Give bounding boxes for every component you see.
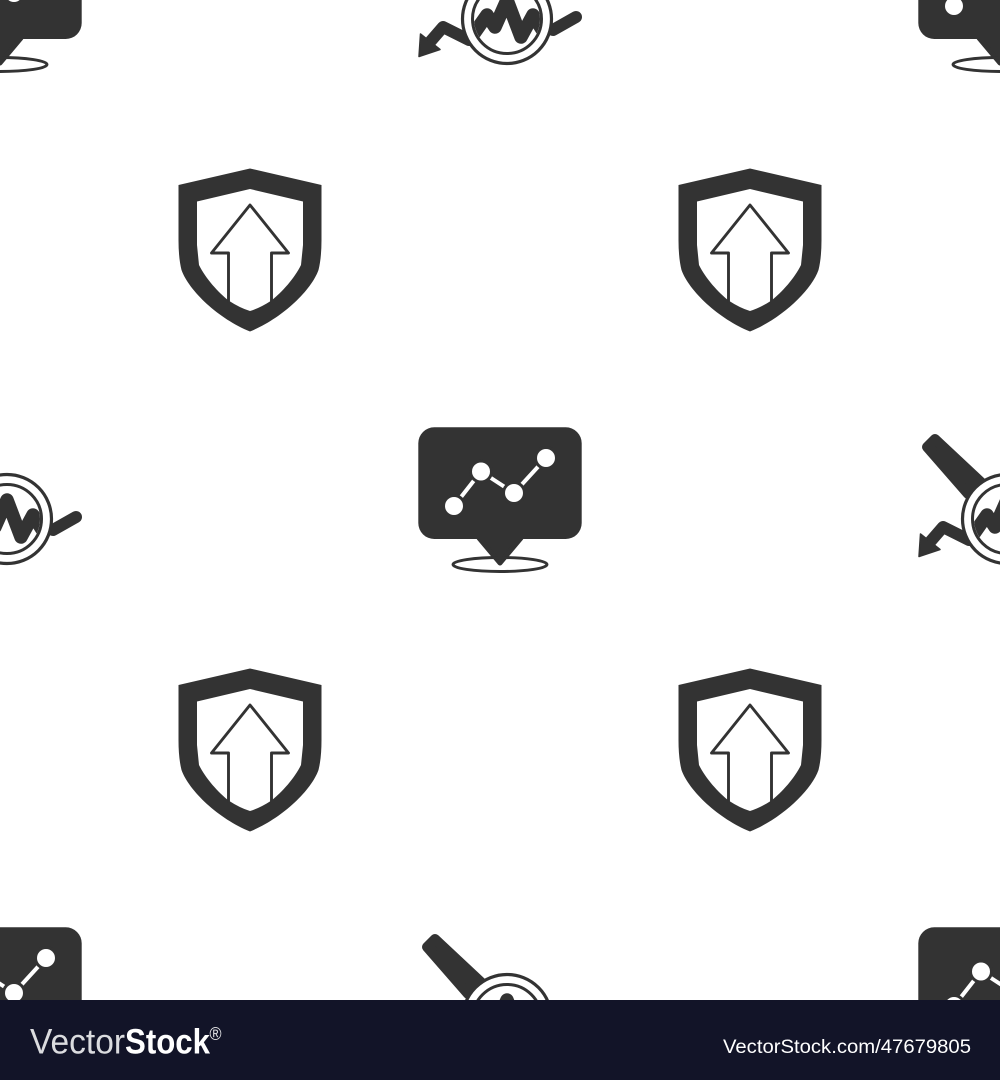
icon: magnifier bottom center (419, 939, 576, 1064)
icon: shield arrow upper left (178, 168, 322, 332)
icon: pin chart center (418, 427, 582, 572)
footer logo: Stock (125, 1022, 210, 1062)
icon: pin chart bottom right (918, 927, 1000, 1072)
icon: pin chart top left (0, 0, 82, 72)
footer logo: ® (210, 1024, 222, 1044)
icon: magnifier top center (419, 0, 576, 64)
footer bar (0, 1000, 1000, 1080)
icon: shield arrow upper right (678, 168, 822, 332)
icon: shield arrow lower left (178, 668, 322, 832)
icon: shield arrow lower right (678, 668, 822, 832)
footer logo (30, 1022, 222, 1062)
icon: magnifier middle right (919, 439, 1000, 564)
icon: magnifier middle left (0, 439, 76, 564)
footer logo: Vector (30, 1022, 125, 1062)
icon: pin chart top right (918, 0, 1000, 72)
footer image id: VectorStock.com/47679805 (723, 1036, 971, 1058)
icon: pin chart bottom left (0, 927, 82, 1072)
